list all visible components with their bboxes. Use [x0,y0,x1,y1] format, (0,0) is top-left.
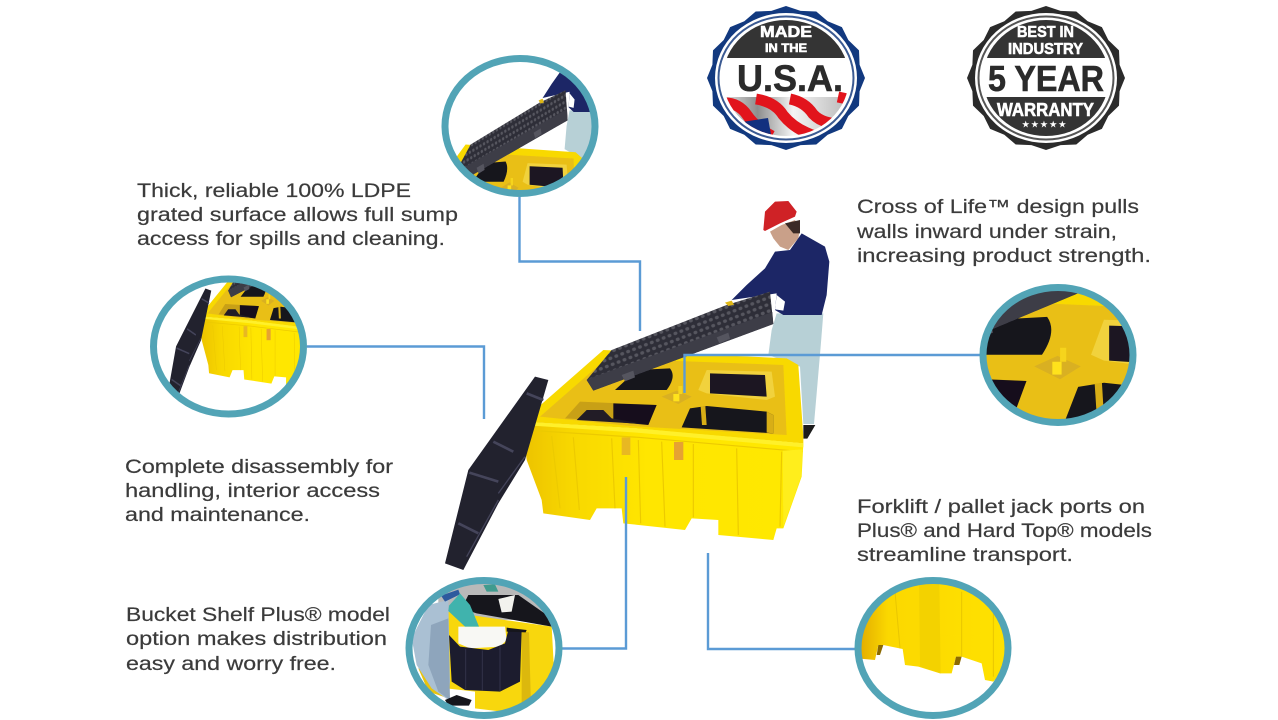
sump: right side panel [783,449,803,527]
white bucket [458,627,507,648]
text: bucket shelf: option makes distribution [126,629,387,650]
text: cross of life: Cross of Life™ design pulls [857,197,1139,218]
text: forklift ports: Forklift / pallet jack ports on [857,497,1145,518]
man: jeans [768,313,823,424]
black counter [462,595,552,627]
text: disassembly: handling, interior access [125,481,380,502]
person's leg [428,618,450,700]
text: cross of life: increasing product strength. [857,246,1151,267]
man: boot [803,425,815,439]
sump: front-right opening [682,406,773,433]
badge: made in the USA: U.S.A. [737,58,843,99]
text: bucket shelf [126,605,390,675]
inset: cross of life detail [980,284,1136,426]
sump column shading [522,632,531,707]
grate leaning at left [445,377,548,570]
badge: 5 year warranty: BEST IN [1017,24,1074,41]
sump: top rim [522,350,803,443]
sump: front-left opening [565,402,657,425]
shoe [445,695,472,706]
badge: 5 year warranty: 5 YEAR [988,58,1104,99]
teal glove [448,593,479,627]
flag [726,92,847,136]
sump: front face [522,422,803,540]
person's sleeve [412,600,450,700]
man: navy shirt [732,233,829,315]
sump: inner deck [540,358,787,435]
bench background [438,584,544,620]
grate being lifted [587,292,773,391]
inset: grate close-up [442,55,598,197]
inset: disassembled sump [150,276,307,418]
text: disassembly: Complete disassembly for [125,457,394,478]
text: grated surface: Thick, reliable 100% LDPE [137,181,411,202]
glove cuff [441,590,460,602]
yellow sump side [448,612,554,711]
text: grated surface [137,181,458,250]
inset: forklift ports [857,575,1013,716]
badge: made in the USA: IN THE [765,41,807,55]
white bottle [498,595,515,612]
green item on bench [483,584,498,592]
inset: bucket shelf [409,580,559,718]
connector line: grated surface [520,197,640,331]
badge: 5 year warranty: WARRANTY [997,100,1094,120]
text: disassembly [125,457,394,526]
sump: raised frame around back-right opening [698,370,775,400]
connector line: bucket shelf [561,477,626,648]
dark bucket shelf [449,628,527,692]
text: grated surface: access for spills and cleaning. [137,229,445,250]
yellow behind leg [418,668,444,697]
badge: 5 year warranty: ★★★★★ [1022,120,1068,129]
sump: back-right opening [710,373,767,397]
text: cross of life: walls inward under strain, [856,222,1117,243]
connector line: forklift ports [708,553,855,649]
sump: ribs [525,430,803,535]
man: face [770,220,800,250]
man: gap between arm and torso [775,295,785,311]
badge: made in the USA [707,6,865,150]
man: hair [785,220,800,233]
sump: rim lip [522,422,803,447]
connector line: disassembly [307,346,484,419]
text: grated surface: grated surface allows full sump [137,205,458,226]
product illustration: man lifting grate off yellow sump [445,201,829,570]
man: red hard hat [763,201,797,231]
badge: 5 year warranty [967,6,1125,150]
sump: cross centre post [662,386,692,404]
text: forklift ports [857,497,1152,566]
text: bucket shelf: Bucket Shelf Plus® model [126,605,390,626]
text: disassembly: and maintenance. [125,505,310,526]
badge: 5 year warranty: INDUSTRY [1008,41,1083,58]
sump: back-left opening [615,368,673,390]
text: cross of life [856,197,1151,267]
connector line: cross of life [684,355,980,393]
badge: made in the USA: MADE [760,24,812,41]
man: hand on grate [725,301,734,306]
text: forklift ports: streamline transport. [857,545,1073,566]
text: bucket shelf: easy and worry free. [126,654,336,675]
sump: tabs [622,437,683,460]
text: forklift ports: Plus® and Hard Top® models [857,521,1152,542]
